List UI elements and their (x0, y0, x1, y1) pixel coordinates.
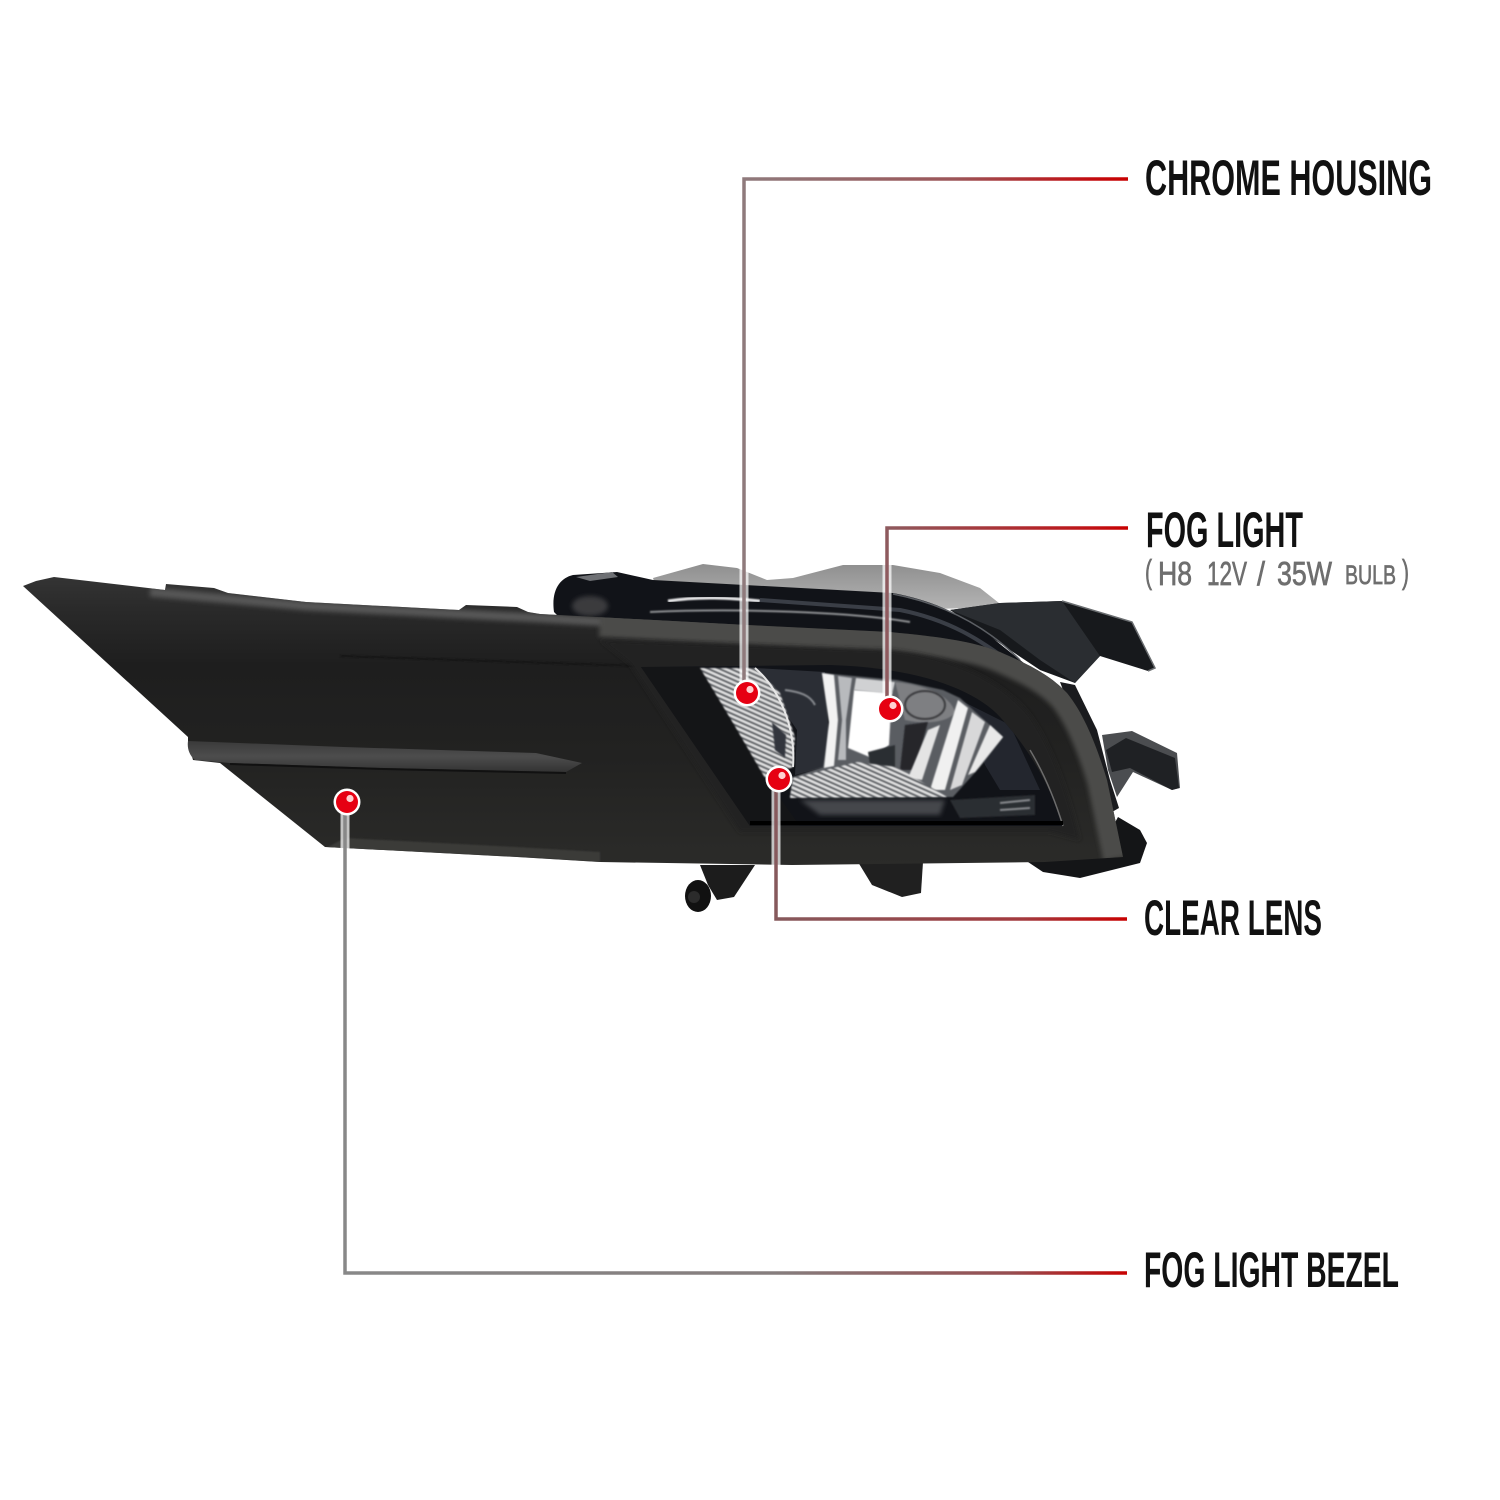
bezel crease (340, 656, 640, 666)
label: bulb specification: 35W (1277, 555, 1333, 592)
inner frame (632, 642, 1072, 836)
callout line: clear lens (776, 790, 1127, 919)
fog light assembly product illustration (23, 564, 1180, 912)
label: bulb specification: ( (1145, 553, 1152, 590)
centre lens dark body (755, 668, 830, 775)
upper mounting bracket (950, 601, 1155, 683)
textured black bezel (23, 577, 1123, 865)
lower mounting bracket (1102, 731, 1180, 797)
callout line: fog light (887, 528, 1128, 700)
bezel top highlight (148, 587, 602, 628)
lower lens reflections (800, 800, 945, 815)
bottom mounting tab (858, 862, 923, 897)
bottom clip with knob (685, 865, 755, 912)
outer rim (600, 617, 1123, 857)
housing side edge (1060, 682, 1119, 812)
bezel raised lip (188, 741, 582, 772)
lens edge highlight (1030, 750, 1063, 826)
lower trim band (748, 833, 1090, 857)
marker: clear lens (766, 766, 792, 792)
main chrome reflector (790, 673, 1003, 797)
label: bulb specification (1145, 553, 1409, 592)
left striped reflector (700, 668, 795, 778)
label: bulb specification: 12V (1207, 555, 1247, 592)
label: bulb specification: BULB (1345, 560, 1396, 590)
chrome reflections (822, 673, 838, 768)
label: bulb specification: / (1257, 555, 1266, 592)
label: fog light: FOG LIGHT (1146, 502, 1303, 558)
marker: fog light bezel (334, 788, 360, 816)
callout line: chrome housing (744, 179, 1128, 685)
label: bulb specification: H8 (1158, 555, 1192, 592)
bezel shaded details clipped to outline (150, 592, 1123, 862)
callout line: fog light bezel (345, 812, 1127, 1273)
label: bulb specification: ) (1402, 553, 1409, 590)
lower round housing ring (1025, 817, 1147, 878)
fog lamp lens and reflector (641, 665, 1063, 826)
marker: chrome housing (734, 680, 760, 706)
housing rear grey shell (653, 564, 1004, 610)
glossy black lens rim (553, 572, 1030, 668)
lower striped reflector (790, 762, 947, 798)
label: clear lens: CLEAR LENS (1144, 890, 1322, 946)
marker: fog light (876, 696, 904, 722)
dark side band (641, 667, 800, 826)
right lens area (960, 700, 1040, 790)
